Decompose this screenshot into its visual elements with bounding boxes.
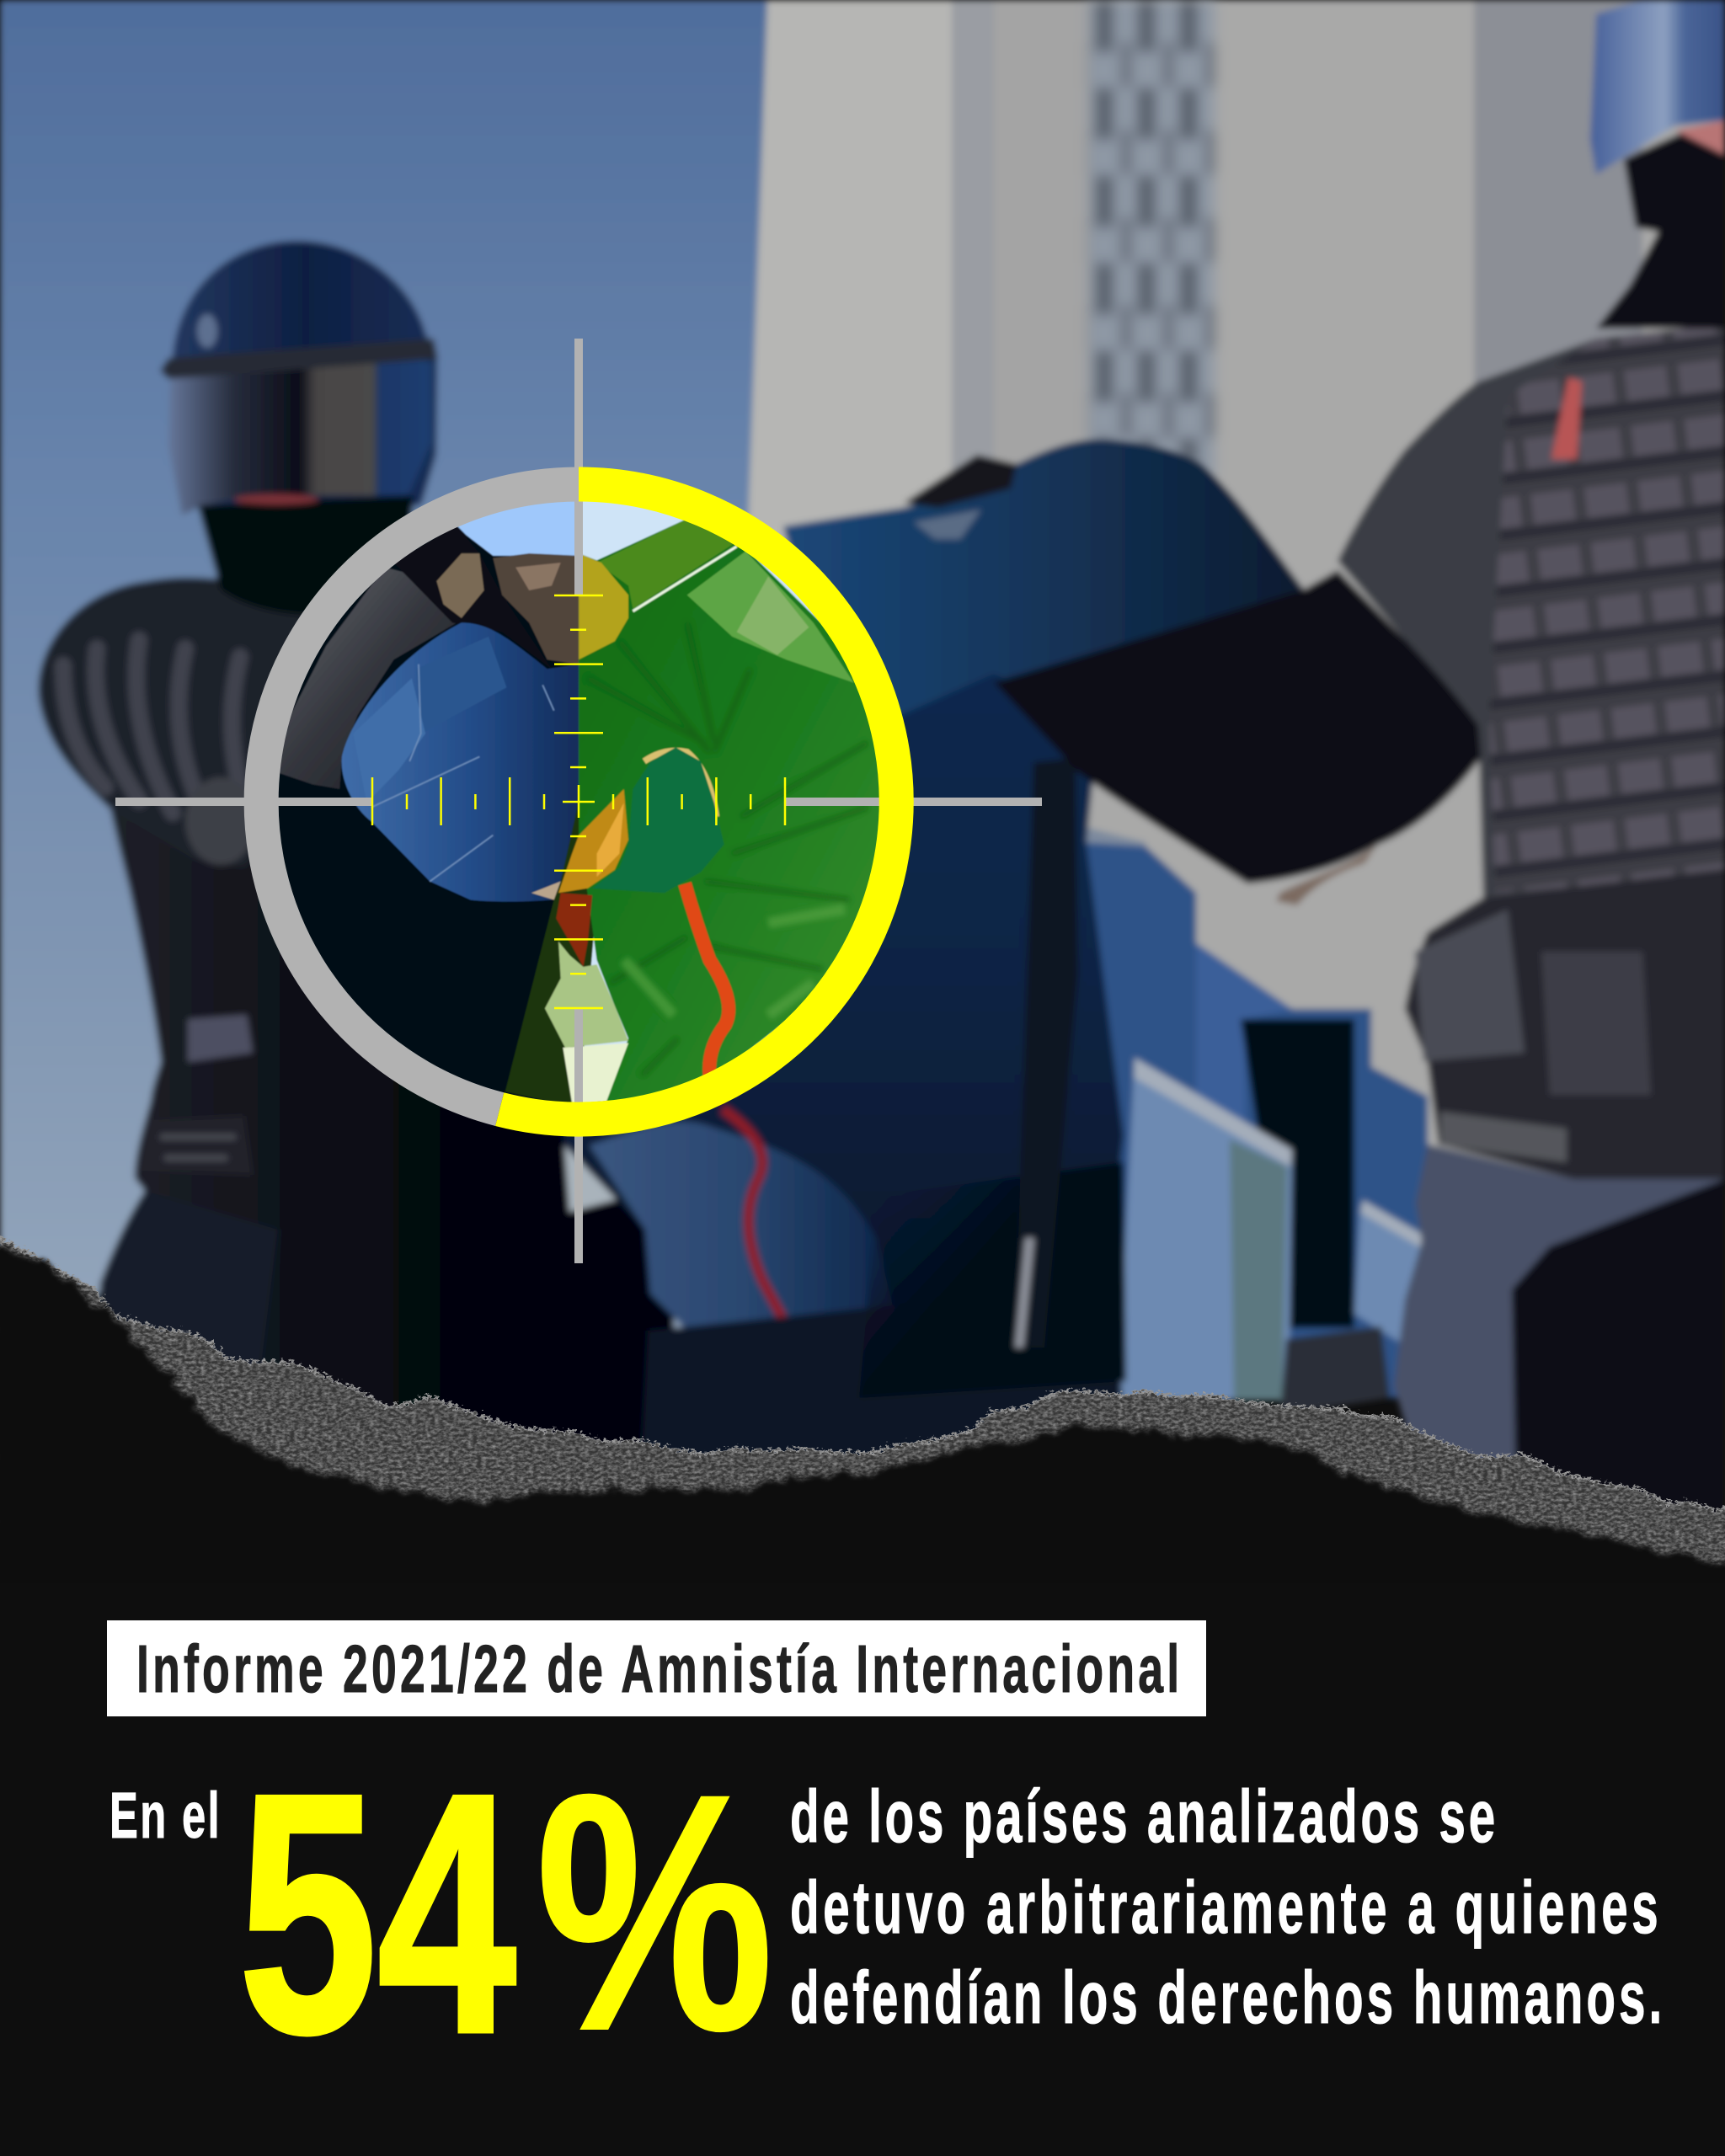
building facade xyxy=(748,0,1725,1179)
lower blue glass building xyxy=(1078,825,1428,1401)
officer right: helmet and mask xyxy=(1590,0,1725,328)
statement text xyxy=(790,1774,1662,2039)
officer right: pouches xyxy=(1405,869,1725,1179)
big statistic: 54%: 54 xyxy=(238,1722,518,2104)
ring: 54 percent arc xyxy=(499,484,896,1119)
lead-in text: En el xyxy=(109,1779,220,1852)
statement text: detuvo arbitrariamente a quienes xyxy=(790,1865,1658,1949)
window grid strip xyxy=(1088,0,1215,480)
officer left: helmet xyxy=(160,241,438,615)
detainee: jacket and arm xyxy=(539,440,1304,1482)
baton xyxy=(1015,758,1078,1348)
officer right: arm gripping detainee xyxy=(994,570,1481,905)
sky xyxy=(0,0,809,1348)
statement text: de los países analizados se xyxy=(790,1774,1495,1858)
officer right: trousers xyxy=(1280,1145,1725,1516)
target scope xyxy=(115,339,1042,1263)
statement text: defendían los derechos humanos. xyxy=(790,1956,1662,2039)
officer left: arm xyxy=(39,578,379,867)
label: report name: Informe 2021/22 de Amnistía Internacional xyxy=(136,1631,1179,1707)
scope lens photo xyxy=(272,494,895,1113)
reticle ticks xyxy=(372,595,785,1008)
officer right: armour vest xyxy=(1338,324,1725,898)
officer left: body xyxy=(84,573,674,1482)
ring: remaining 46 percent xyxy=(261,484,579,1109)
torn paper edge xyxy=(0,1238,1725,2156)
crosshair lines xyxy=(115,339,1042,1263)
background photo: riot police detaining a man xyxy=(0,0,1725,1516)
big statistic: 54%: % xyxy=(536,1724,774,2100)
